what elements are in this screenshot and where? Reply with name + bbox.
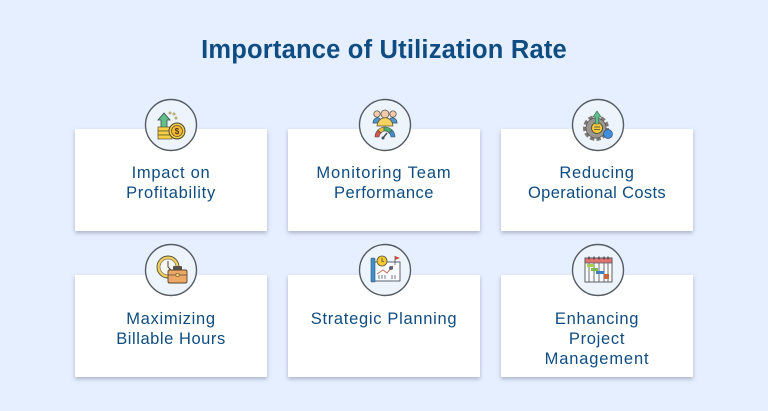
panel: Enhancing Project Management: Enhancing [555, 310, 639, 328]
panel: Reducing Operational Costs: Reducing [559, 164, 635, 182]
icon: gantt calendar [572, 244, 624, 296]
panel: Reducing Operational Costs [501, 129, 693, 231]
panel: Impact on Profitability [75, 129, 267, 231]
panel: Maximizing Billable Hours: Billable Hours [116, 330, 226, 348]
panel: Enhancing Project Management: Project [569, 330, 625, 348]
panel: Enhancing Project Management: Management [545, 350, 649, 368]
panel: Monitoring Team Performance: Monitoring Team [316, 164, 452, 182]
panel: Monitoring Team Performance [288, 129, 480, 231]
panel: Maximizing Billable Hours: Maximizing [126, 310, 216, 328]
title: Importance of Utilization Rate [201, 36, 567, 64]
icon: profit coins and arrow: $ [175, 127, 180, 136]
icon: gear with arrow and coin [572, 98, 624, 152]
panel: Monitoring Team Performance: Performance [334, 184, 434, 202]
panel: Impact on Profitability: Profitability [126, 184, 216, 202]
panel: Strategic Planning [288, 275, 480, 377]
panel: Maximizing Billable Hours [75, 275, 267, 377]
icon: strategic plan board [358, 244, 412, 296]
icon: clock with briefcase [144, 244, 198, 296]
icon: team performance gauge [358, 98, 412, 152]
panel: Reducing Operational Costs: Operational Costs [528, 184, 666, 202]
icon: profit coins and arrow [144, 98, 198, 152]
panel: Strategic Planning: Strategic Planning [311, 310, 457, 328]
panel: Enhancing Project Management [501, 275, 693, 377]
panel: Impact on Profitability: Impact on [132, 164, 210, 182]
